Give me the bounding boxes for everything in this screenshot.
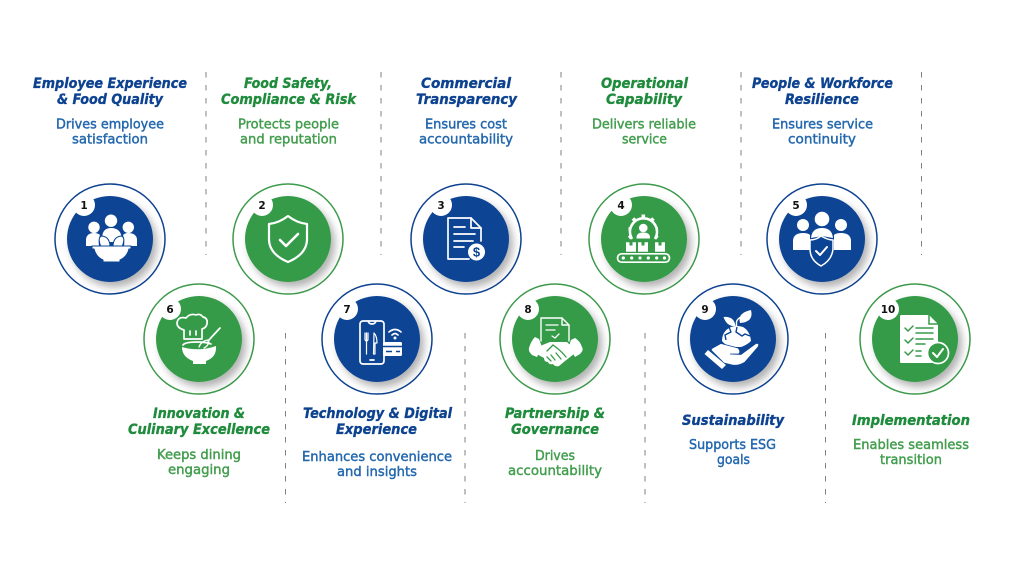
text block: accountability xyxy=(419,132,513,148)
heading xyxy=(128,406,270,438)
number 3: 3 xyxy=(437,200,445,212)
text block: transition xyxy=(880,452,942,468)
text block: continuity xyxy=(788,132,856,148)
heading xyxy=(221,76,358,108)
badge circle xyxy=(500,284,610,394)
number 5 xyxy=(785,194,807,216)
badge circle xyxy=(144,284,254,394)
number 1 xyxy=(73,194,95,216)
text block: Ensures service xyxy=(772,116,873,132)
icon: people with salad bowl xyxy=(86,214,137,262)
badge circle xyxy=(678,284,788,394)
heading xyxy=(752,76,893,108)
text block: service xyxy=(622,132,667,148)
heading: People & Workforce xyxy=(752,76,893,92)
number 4 xyxy=(610,194,632,216)
heading xyxy=(601,76,688,108)
heading xyxy=(416,76,518,108)
text block: accountability xyxy=(508,463,602,479)
number 10 xyxy=(877,298,899,320)
panel: 10 implementation xyxy=(852,284,970,468)
heading: Capability xyxy=(606,92,683,108)
badge circle xyxy=(767,184,877,294)
text block xyxy=(853,437,969,468)
number 3 xyxy=(430,194,452,216)
heading: Employee Experience xyxy=(33,76,187,92)
number 7: 7 xyxy=(343,304,351,316)
text block: Supports ESG xyxy=(689,437,776,453)
text block: Drives employee xyxy=(56,116,164,132)
text block xyxy=(157,447,241,478)
number 2: 2 xyxy=(258,200,266,212)
text block xyxy=(302,449,452,480)
text block xyxy=(56,116,164,148)
text block xyxy=(772,116,873,148)
heading: Commercial xyxy=(421,76,511,92)
number 7 xyxy=(336,298,358,320)
heading xyxy=(303,406,452,438)
number 6: 6 xyxy=(166,304,174,316)
icon: document with dollar: $ xyxy=(473,244,481,260)
number 6 xyxy=(159,298,181,320)
text block: goals xyxy=(717,452,750,468)
heading: & Food Quality xyxy=(57,92,164,108)
heading: Innovation & xyxy=(153,406,245,422)
number 10: 10 xyxy=(881,304,895,316)
panel: 1 employee experience xyxy=(33,76,187,294)
panel: 4 operational capability xyxy=(589,76,699,294)
text block xyxy=(592,116,696,148)
badge circle xyxy=(55,184,165,294)
number 1: 1 xyxy=(80,200,88,212)
icon: team with shield xyxy=(793,212,851,266)
icon: chef hat and mixing bowl xyxy=(177,314,220,364)
number 5: 5 xyxy=(792,200,800,212)
heading: Technology & Digital xyxy=(303,406,452,422)
panel: 6 innovation xyxy=(128,284,270,478)
text block: and reputation xyxy=(240,132,337,148)
heading: Culinary Excellence xyxy=(128,422,270,438)
text block xyxy=(508,448,602,479)
text block: Drives xyxy=(535,448,575,464)
badge circle xyxy=(322,284,432,394)
heading: Governance xyxy=(511,422,599,438)
heading: Resilience xyxy=(785,92,859,108)
number 4: 4 xyxy=(617,200,625,212)
text block: Keeps dining xyxy=(157,447,241,463)
icon: handshake with document xyxy=(529,318,583,366)
badge circle xyxy=(233,184,343,294)
text block: satisfaction xyxy=(72,132,148,148)
text block: and insights xyxy=(337,464,417,480)
text block: Ensures cost xyxy=(425,116,507,132)
heading: Compliance & Risk xyxy=(221,92,358,108)
heading: Sustainability xyxy=(682,413,785,429)
heading xyxy=(33,76,187,108)
panel: 2 food safety xyxy=(221,76,358,294)
heading: Operational xyxy=(601,76,688,92)
text block: Enhances convenience xyxy=(302,449,452,465)
icon: hand holding plant and globe xyxy=(704,310,759,369)
panel: 8 partnership xyxy=(500,284,610,479)
heading xyxy=(505,406,605,438)
heading: Experience xyxy=(336,422,417,438)
heading: Transparency xyxy=(416,92,518,108)
icon: document with dollar xyxy=(448,218,485,260)
heading: Partnership & xyxy=(505,406,605,422)
text block: Enables seamless xyxy=(853,437,969,453)
panel: 7 technology xyxy=(302,284,452,480)
text block: Delivers reliable xyxy=(592,116,696,132)
number 8: 8 xyxy=(524,304,532,316)
badge circle xyxy=(411,184,521,294)
text block xyxy=(689,437,776,468)
number 2 xyxy=(251,194,273,216)
text block xyxy=(238,116,339,148)
icon: shield with check xyxy=(269,216,307,262)
icon: phone, wifi and card xyxy=(360,321,402,364)
panel: 3 commercial transparency xyxy=(411,76,521,294)
number 8 xyxy=(517,298,539,320)
icon: gear and conveyor xyxy=(618,214,670,262)
badge circle xyxy=(589,184,699,294)
panel: 5 people and workforce xyxy=(752,76,893,294)
text block xyxy=(419,116,513,148)
number 9 xyxy=(694,298,716,320)
badge circle xyxy=(860,284,970,394)
panel: 9 sustainability xyxy=(678,284,788,468)
number 9: 9 xyxy=(701,304,709,316)
heading: Implementation xyxy=(852,413,970,429)
text block: Protects people xyxy=(238,116,339,132)
heading: Food Safety, xyxy=(244,76,332,92)
icon: checklist document xyxy=(900,315,948,364)
text block: engaging xyxy=(168,462,230,478)
